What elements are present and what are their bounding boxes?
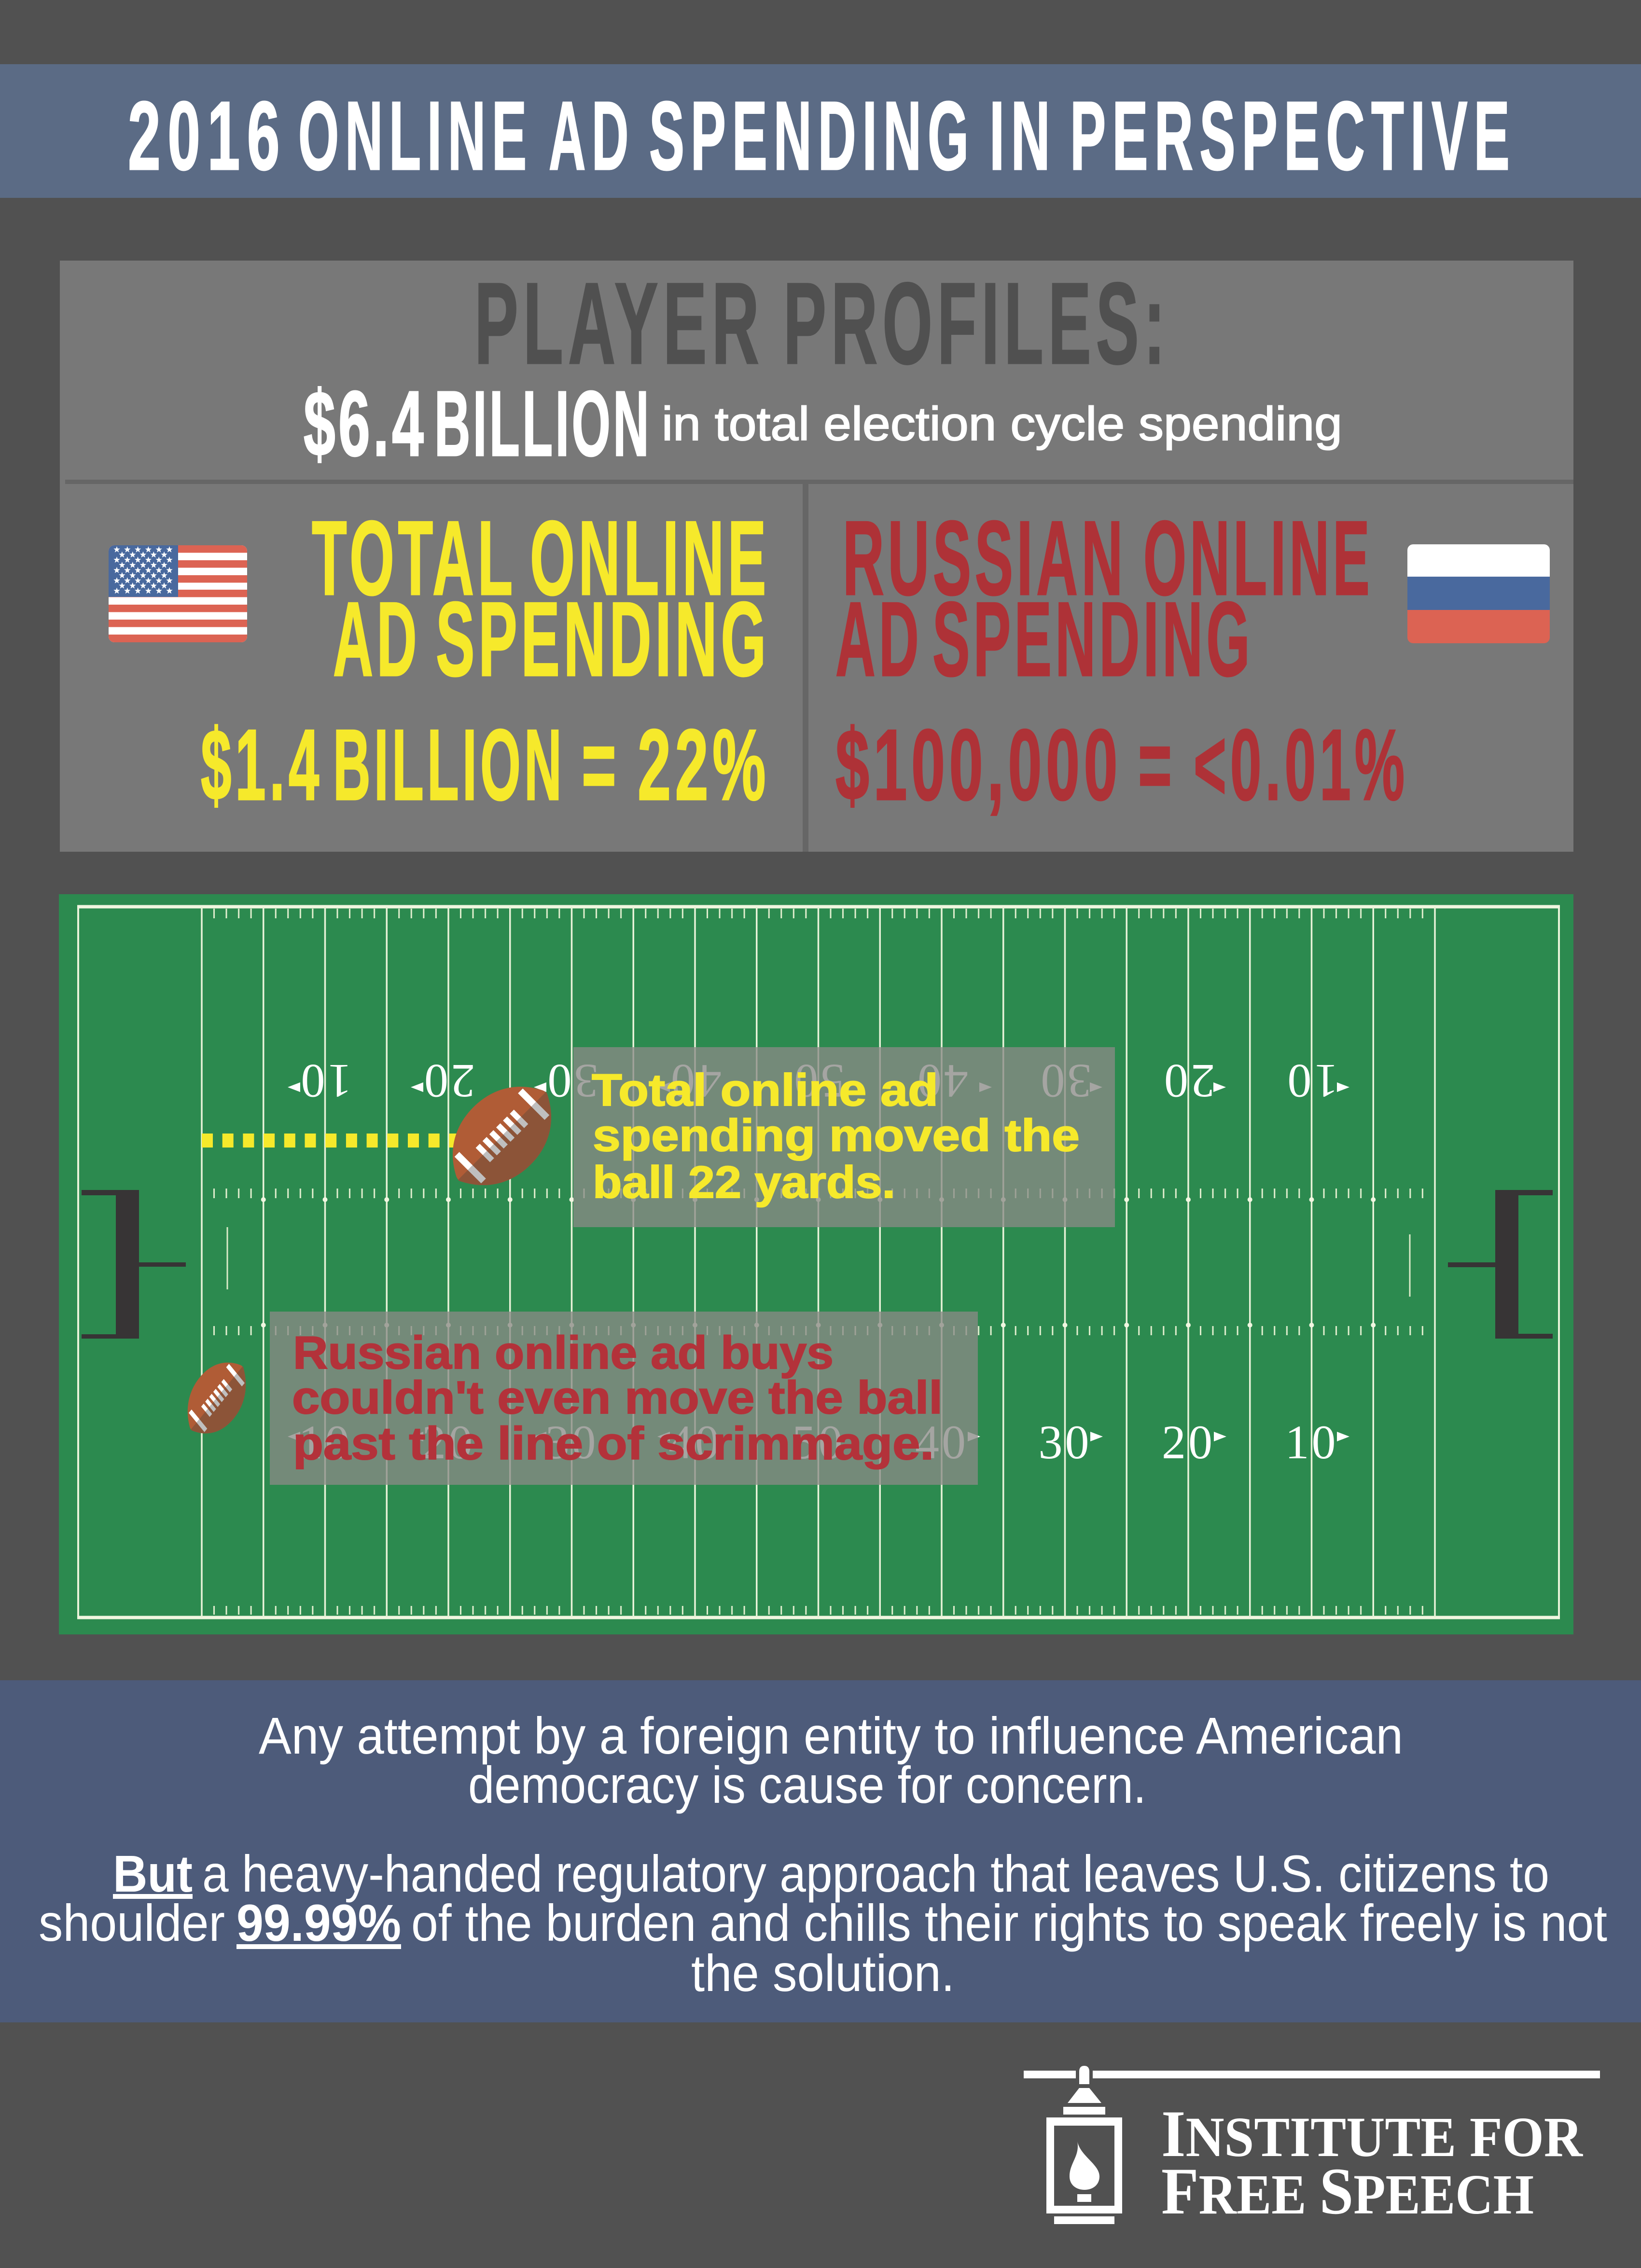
icon: Russian flag: [1407, 544, 1550, 643]
total online ad spending heading: AD: [333, 581, 420, 698]
heading: player profiles: PROFILES:: [783, 259, 1170, 388]
total election spending caption: in total election cycle spending: [662, 397, 1342, 450]
total election spending figure: $6.4: [304, 372, 427, 475]
russian online ad spending heading: RUSSIAN: [843, 499, 1126, 617]
yard numbers: far side (inverted): 40: [915, 1054, 968, 1108]
yard numbers: far side (inverted): 40: [668, 1054, 722, 1108]
conclusion paragraph one: democracy is cause for concern.: [468, 1756, 1146, 1814]
conclusion paragraph two: 99.99%: [236, 1894, 401, 1952]
yard numbers: far side (inverted): 50: [792, 1054, 845, 1108]
russian online ad spending heading: SPENDING: [932, 581, 1253, 698]
yard numbers: far side (inverted): 30: [1039, 1054, 1092, 1108]
total online ad spending figure: =: [582, 709, 620, 821]
conclusion paragraph two: But: [113, 1844, 193, 1903]
yard numbers: near side: [288, 1415, 1349, 1469]
russian online ad spending figure: $100,000: [835, 709, 1122, 821]
conclusion banner: [0, 1680, 1641, 2022]
heading: player profiles: PLAYER: [474, 259, 764, 388]
goal post: right: [1448, 1190, 1553, 1339]
callout text: total online: [592, 1065, 1080, 1207]
yard numbers: near side: 20: [1162, 1415, 1215, 1469]
logo wordmark: [1161, 2097, 1584, 2228]
icon: football at line of scrimmage: [174, 1346, 260, 1450]
total online ad spending figure: BILLION: [333, 709, 565, 821]
yard numbers: far side (inverted): 30: [545, 1054, 598, 1108]
total election spending figure: [304, 372, 652, 475]
total online ad spending figure: 22%: [638, 709, 770, 821]
yard numbers: near side: 40: [668, 1415, 722, 1469]
conclusion paragraph one: [259, 1706, 1403, 1814]
yard numbers: near side: 30: [1039, 1415, 1092, 1469]
yard numbers: near side: 10: [1285, 1415, 1338, 1469]
title banner: [0, 64, 1641, 198]
callout box: total online ad spending: [573, 1047, 1115, 1227]
callout text: total online: Total online ad: [592, 1065, 938, 1115]
conclusion paragraph one: Any attempt by a foreign entity to influence American: [259, 1706, 1403, 1765]
conclusion paragraph two: [39, 1844, 1607, 2002]
yard numbers: far side (inverted): 10: [1285, 1054, 1338, 1108]
icon: US flag: [109, 545, 247, 642]
logo wordmark: FREE SPEECH: [1161, 2154, 1534, 2228]
logo: Institute for Free Speech: [1024, 2066, 1600, 2228]
callout text: total online: spending moved the: [593, 1110, 1080, 1161]
icon: football at 22 yards: [429, 1063, 575, 1209]
russian online ad spending heading: ONLINE: [1143, 499, 1373, 617]
yard numbers: far side (inverted): 10: [298, 1054, 351, 1108]
total online ad spending heading: ONLINE: [530, 499, 770, 617]
yard numbers: near side: 40: [915, 1415, 968, 1469]
title: [128, 81, 1516, 190]
russian online ad spending figure: =: [1138, 709, 1176, 821]
callout text: total online: ball 22 yards.: [593, 1157, 895, 1207]
yard numbers: near side: 20: [422, 1415, 475, 1469]
callout text: russian online: past the line of scrimmage.: [293, 1418, 934, 1469]
yard numbers: far side (inverted): [288, 1054, 1349, 1108]
title: IN: [989, 81, 1057, 190]
conclusion paragraph two: the solution.: [691, 1944, 955, 2002]
yard numbers: near side: 10: [298, 1415, 351, 1469]
yardage dashed line: [202, 1134, 459, 1148]
conclusion paragraph two: a heavy-handed regulatory approach that leaves U.S. citizens to: [202, 1844, 1549, 1903]
callout text: russian online: couldn't even move the ball: [292, 1372, 943, 1424]
russian online ad spending heading: [835, 499, 1373, 698]
yard numbers: far side (inverted): 20: [1162, 1054, 1215, 1108]
total election spending figure: BILLION: [434, 372, 652, 475]
yard numbers: near side: 30: [545, 1415, 598, 1469]
callout box: russian online ad buys: [270, 1312, 978, 1485]
callout text: russian online: [292, 1327, 943, 1469]
callout text: russian online: Russian online ad buys: [293, 1327, 834, 1379]
russian online ad spending figure: <0.01%: [1194, 709, 1408, 821]
title: AD: [549, 81, 635, 190]
title: ONLINE: [298, 81, 533, 190]
russian online ad spending heading: AD: [835, 581, 922, 698]
goal post: left: [82, 1190, 186, 1339]
yard numbers: near side: 50: [792, 1415, 845, 1469]
total online ad spending figure: $1.4: [201, 709, 323, 821]
total online ad spending heading: TOTAL: [312, 499, 516, 617]
logo lantern icon: [1024, 2066, 1600, 2224]
panel: player profiles: [60, 259, 1573, 852]
conclusion paragraph two: shoulder: [39, 1894, 225, 1952]
football field: [59, 894, 1573, 1634]
logo wordmark: INSTITUTE FOR: [1161, 2097, 1584, 2171]
total online ad spending heading: SPENDING: [436, 581, 770, 698]
title: SPENDING: [649, 81, 975, 190]
yard numbers: far side (inverted): 20: [422, 1054, 475, 1108]
total online ad spending heading: [312, 499, 770, 698]
title: 2016: [128, 81, 287, 190]
